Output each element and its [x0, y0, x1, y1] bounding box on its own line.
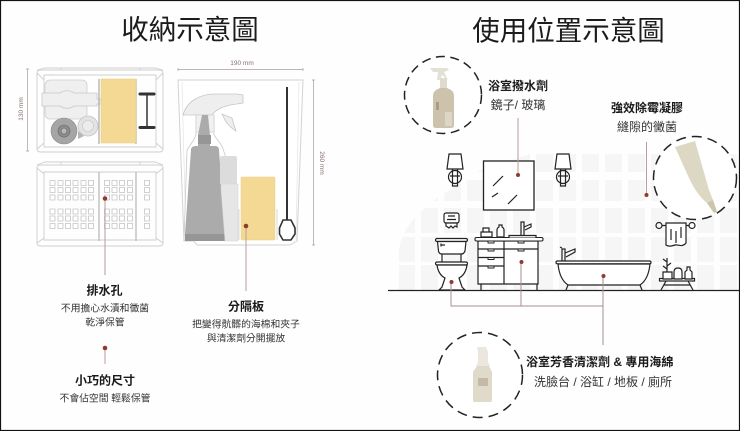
dimension: 190 mm: 190 mm [230, 60, 254, 67]
heading: usage location diagram: 使用位置示意圖 [472, 15, 665, 46]
product label: cleaner and sponge: 洗臉台 / 浴缸 / 地板 / 廁所 [534, 374, 672, 389]
spray bottle outline [184, 115, 226, 241]
sponge [101, 79, 136, 143]
product label: water repellent: 鏡子/ 玻璃 [491, 97, 545, 112]
shelf with plant and jars [660, 258, 694, 290]
clip handle [42, 91, 102, 108]
callout: drain holes: 乾淨保管 [85, 316, 125, 328]
callout: divider: 與清潔劑分開擺放 [207, 332, 285, 344]
folded cloth [45, 80, 87, 119]
callout: drain holes: 不用擔心水漬和黴菌 [61, 302, 149, 314]
spray head [183, 94, 243, 131]
sconce left [447, 154, 463, 186]
small bottle [220, 156, 237, 184]
tray and soap [481, 232, 492, 237]
bathtub [556, 247, 651, 290]
callout line: tile gaps [644, 142, 648, 197]
sconce right [555, 154, 571, 186]
connector lines with dots: toilet, vanity, bathtub [450, 260, 606, 345]
callout: compact size: 不會佔空間 輕鬆保管 [60, 392, 151, 404]
brush [140, 94, 154, 128]
callout: divider [192, 224, 300, 344]
product photo: anti-mold gel tube [654, 136, 736, 220]
tile wall background [398, 151, 737, 290]
product label: anti-mold gel [611, 100, 683, 134]
callout: divider: 分隔板 [228, 298, 264, 314]
product photo: bathroom water repellent spray [404, 56, 482, 134]
floor [388, 290, 740, 292]
sponge [239, 209, 277, 240]
callout: drain holes [61, 196, 149, 328]
sink and faucet [509, 236, 536, 238]
callout line: mirror [516, 118, 520, 177]
heading: storage diagram: 收納示意圖 [121, 14, 259, 45]
divider bars [99, 79, 136, 144]
product label: cleaner and sponge [526, 354, 673, 389]
product label: anti-mold gel: 強效除霉凝膠 [611, 100, 683, 115]
callout: drain holes: 排水孔 [86, 282, 123, 298]
callout: compact size [60, 346, 151, 404]
dimension: 130 mm [18, 69, 29, 151]
container side view with contents [178, 80, 303, 245]
dimension: 260 mm [312, 80, 325, 245]
towel rail [656, 222, 695, 246]
paper holder [444, 213, 459, 228]
bathroom illustration [388, 154, 740, 290]
dimension: 260 mm: 260 mm [318, 151, 325, 175]
product label: cleaner and sponge: 浴室芳香清潔劑 & 專用海綿 [526, 354, 673, 369]
product label: water repellent: 浴室撥水劑 [488, 78, 548, 93]
dimension: 190 mm [178, 60, 303, 71]
dimension: 130 mm: 130 mm [18, 97, 25, 121]
container outline [178, 80, 303, 245]
product label: water repellent [488, 78, 548, 112]
vanity [475, 222, 543, 290]
callout: divider: 把變得骯髒的海棉和夾子 [192, 318, 300, 330]
tray top view with contents [37, 68, 163, 152]
grey roll [51, 123, 84, 139]
callout: compact size: 小巧的尺寸 [75, 372, 135, 388]
product photo: bathroom cleaner spray [438, 332, 522, 418]
product label: anti-mold gel: 縫隙的黴菌 [617, 119, 677, 134]
light roll [78, 116, 98, 136]
tray bottom view with drain holes [37, 162, 163, 246]
mirror [484, 161, 534, 210]
brush [286, 87, 288, 220]
toilet [436, 238, 468, 290]
grey tube [185, 115, 225, 241]
